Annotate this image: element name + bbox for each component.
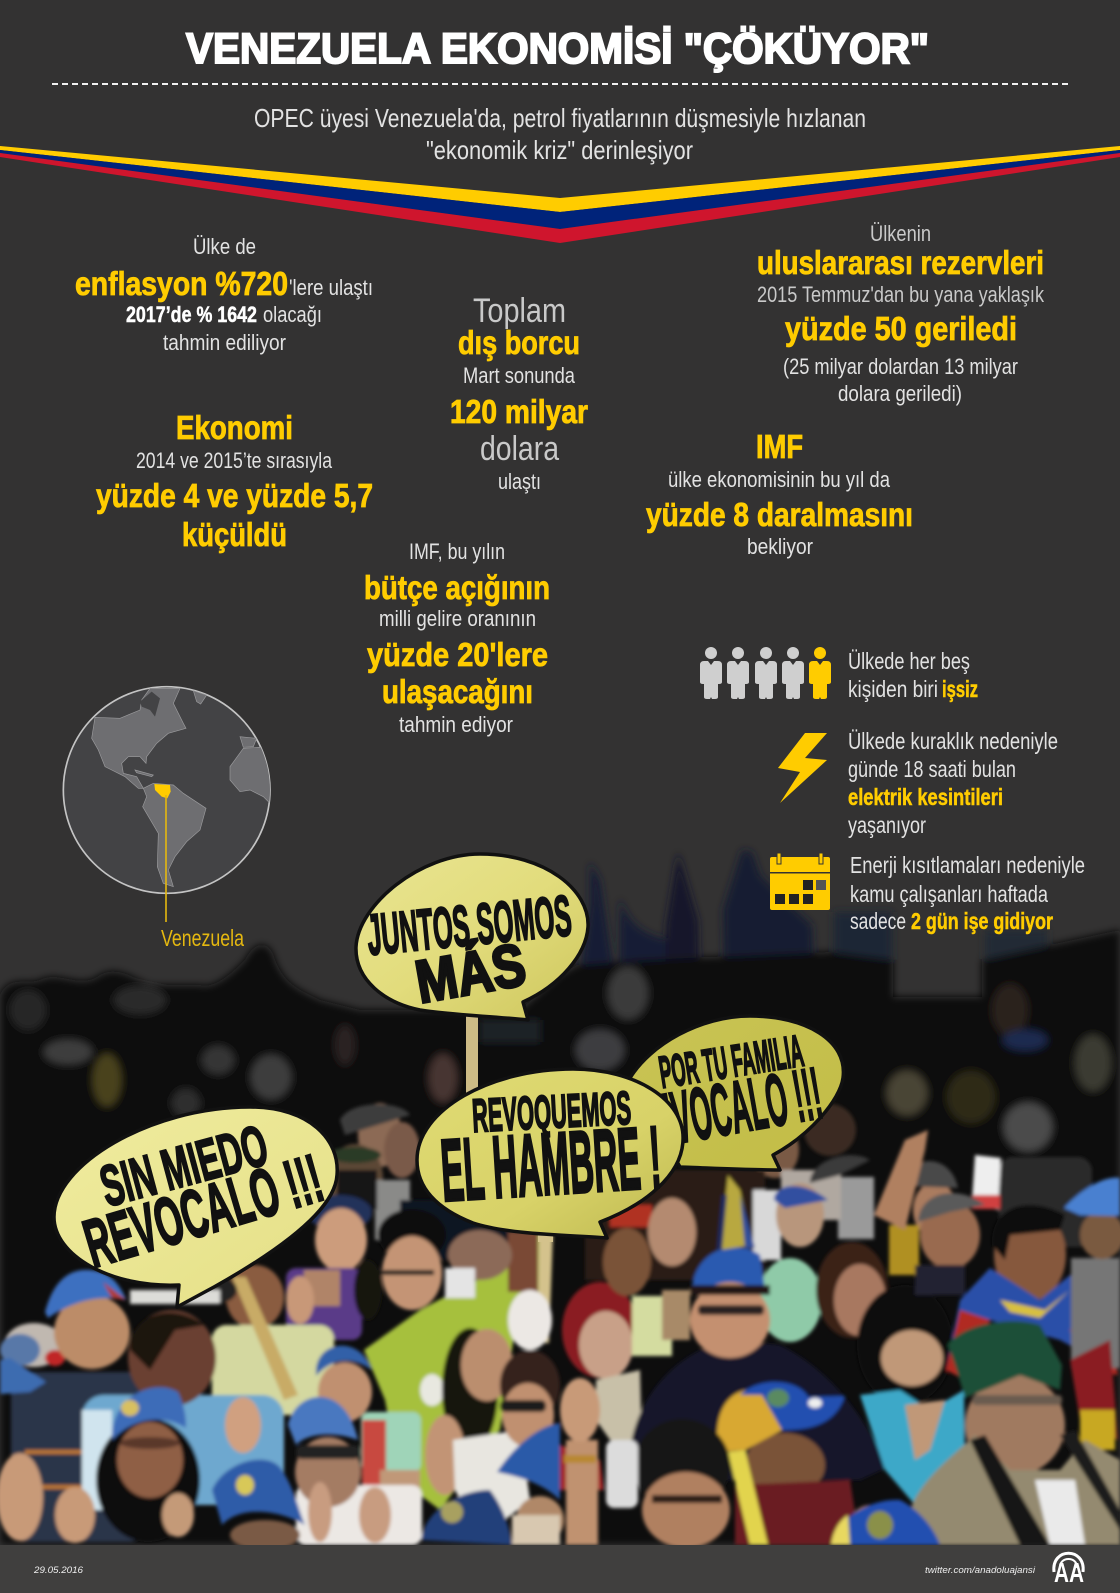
stat: budget deficit: ulaşacağını [382, 673, 533, 710]
stat: budget deficit [364, 539, 550, 737]
woman hair [442, 1328, 498, 1452]
globe map: Venezuela [161, 925, 244, 951]
photo: protest crowd [0, 850, 1120, 1550]
stat: budget deficit: milli gelire oranının [379, 606, 536, 631]
yellow-blue cap woman [745, 1433, 825, 1497]
sign: por tu familia revocalo: POR TU FAMILIA [656, 1025, 807, 1098]
logo: Anadolu Agency [1054, 1553, 1084, 1588]
text: unemployment: Ülkede her beş [848, 648, 970, 674]
stat: IMF contraction: ülke ekonomisinin bu yıl da [668, 467, 891, 492]
stat: budget deficit: IMF, bu yılın [409, 539, 505, 564]
sign: por tu familia revocalo [628, 1016, 843, 1170]
text: EL HAMBRE ! [438, 1107, 664, 1220]
sign: revoquemos el hambre: REVOQUEMOS [471, 1081, 632, 1142]
title: VENEZUELA EKONOMİSİ "ÇÖKÜYOR" [186, 25, 929, 73]
subtitle [254, 103, 866, 165]
stat: foreign debt: ulaştı [498, 469, 541, 494]
stat: budget deficit: bütçe açığının [364, 569, 550, 606]
bottom caps [296, 1485, 422, 1545]
man with raised arm lime shirt [376, 1209, 446, 1254]
text: power cuts: Ülkede kuraklık nedeniyle [848, 728, 1058, 754]
footer: twitter.com/anadoluajansi [925, 1565, 1036, 1576]
flag chevron [0, 146, 1120, 243]
icon: calendar [770, 853, 830, 910]
small flag and pole [720, 1175, 752, 1250]
teal shirt / face [361, 1412, 421, 1472]
sign: sin miedo revocalo [54, 1107, 337, 1307]
stick [538, 1233, 553, 1343]
person green collar [226, 1265, 284, 1329]
caps mid right [910, 1184, 954, 1232]
stat: foreign debt: 120 milyar [450, 393, 588, 430]
text: power cuts: yaşanıyor [848, 812, 926, 838]
logo: Anadolu Agency: AA [1054, 1557, 1084, 1588]
text: work week: sadece [850, 908, 906, 934]
stat: economy shrinkage: 2014 ve 2015’te sırasıyla [136, 448, 333, 473]
stat: inflation: olacağı [263, 302, 322, 327]
stray faces left of sign [358, 1103, 402, 1167]
stat: economy shrinkage [96, 409, 373, 553]
stat: economy shrinkage: Ekonomi [176, 409, 293, 446]
sign: sin miedo revocalo: SIN MIEDO [94, 1113, 275, 1220]
red-hair woman [562, 1282, 638, 1378]
text: power cuts: günde 18 saati bulan [848, 756, 1016, 782]
far right cap [1071, 1258, 1120, 1368]
globe map [63, 687, 273, 951]
stat: inflation: 'lere ulaştı [289, 275, 373, 300]
subtitle: "ekonomik kriz" derinleşiyor [426, 135, 693, 165]
text: unemployment: kişiden biri [848, 676, 938, 702]
stat: reserves: yüzde 50 geriledi [785, 310, 1017, 347]
stat: reserves: 2015 Temmuz'dan bu yana yaklaşık [757, 282, 1045, 307]
stat: IMF contraction [646, 428, 913, 559]
text: unemployment: işsiz [942, 676, 978, 702]
bandana man [1070, 1340, 1118, 1440]
sign: revoquemos el hambre [417, 1069, 683, 1238]
stat: IMF contraction: yüzde 8 daralmasını [646, 496, 913, 533]
text: work week [850, 852, 1085, 934]
woman cap 1 [96, 1418, 200, 1542]
white shirt woman [453, 1430, 530, 1540]
pole: revoquemos [538, 1232, 553, 1242]
man navy shirt [758, 1258, 822, 1342]
young man [636, 1420, 730, 1496]
man with flag [992, 1226, 1069, 1302]
stat: economy shrinkage: yüzde 4 ve yüzde 5,7 [96, 477, 373, 514]
stat: economy shrinkage: küçüldü [182, 516, 287, 553]
footer: 29.05.2016 [33, 1565, 84, 1576]
fist and white tee [606, 1440, 638, 1508]
icon: lightning bolt [778, 733, 827, 803]
text: power cuts [848, 728, 1058, 838]
woman purple [308, 1195, 372, 1231]
dark man and blue shirt [82, 1395, 284, 1505]
stat: inflation: 2017’de % 1642 [126, 302, 257, 327]
stat: foreign debt: Toplam [473, 292, 566, 330]
text: unemployment [848, 648, 978, 702]
right upper background [999, 1157, 1092, 1247]
pole: juntos somos mas [466, 1010, 478, 1095]
sign: sin miedo revocalo: REVOCALO !!! [76, 1140, 331, 1282]
text: power cuts: elektrik kesintileri [848, 784, 1003, 810]
stat: foreign debt: dış borcu [458, 324, 580, 361]
icon: five people [700, 647, 831, 699]
stat: reserves: Ülkenin [870, 221, 931, 246]
black hair woman [857, 1285, 953, 1405]
stat: reserves [757, 221, 1045, 406]
woman crying [816, 1242, 888, 1338]
stat: foreign debt: Mart sonunda [463, 363, 576, 388]
stat: budget deficit: tahmin ediyor [399, 712, 513, 737]
text: work week: kamu çalışanları haftada [850, 881, 1048, 907]
bottom centre cap [831, 1500, 940, 1545]
stat: foreign debt: dolara [480, 430, 559, 468]
text: JUNTOS SOMOS [364, 883, 574, 968]
text: work week: 2 gün işe gidiyor [911, 908, 1053, 934]
stat: reserves: dolara geriledi) [838, 381, 962, 406]
stat: budget deficit: yüzde 20'lere [367, 636, 548, 673]
stat: inflation [75, 234, 373, 355]
subtitle: OPEC üyesi Venezuela'da, petrol fiyatlarının düşmesiyle hızlanan [254, 103, 866, 133]
stat: IMF contraction: IMF [756, 428, 803, 465]
left cap man [4, 1323, 64, 1367]
stat: IMF contraction: bekliyor [747, 534, 813, 559]
stat: reserves: (25 milyar dolardan 13 milyar [783, 354, 1018, 379]
stat: reserves: uluslararası rezervleri [757, 244, 1044, 281]
sign: juntos somos mas: MÁS [411, 931, 531, 1016]
stat: inflation: enflasyon %720 [75, 265, 288, 302]
stat: inflation: Ülke de [193, 234, 256, 259]
stat: foreign debt [450, 292, 588, 494]
footer [0, 1545, 1120, 1593]
stat: inflation: tahmin ediliyor [163, 330, 286, 355]
sign: juntos somos mas [356, 854, 588, 1020]
